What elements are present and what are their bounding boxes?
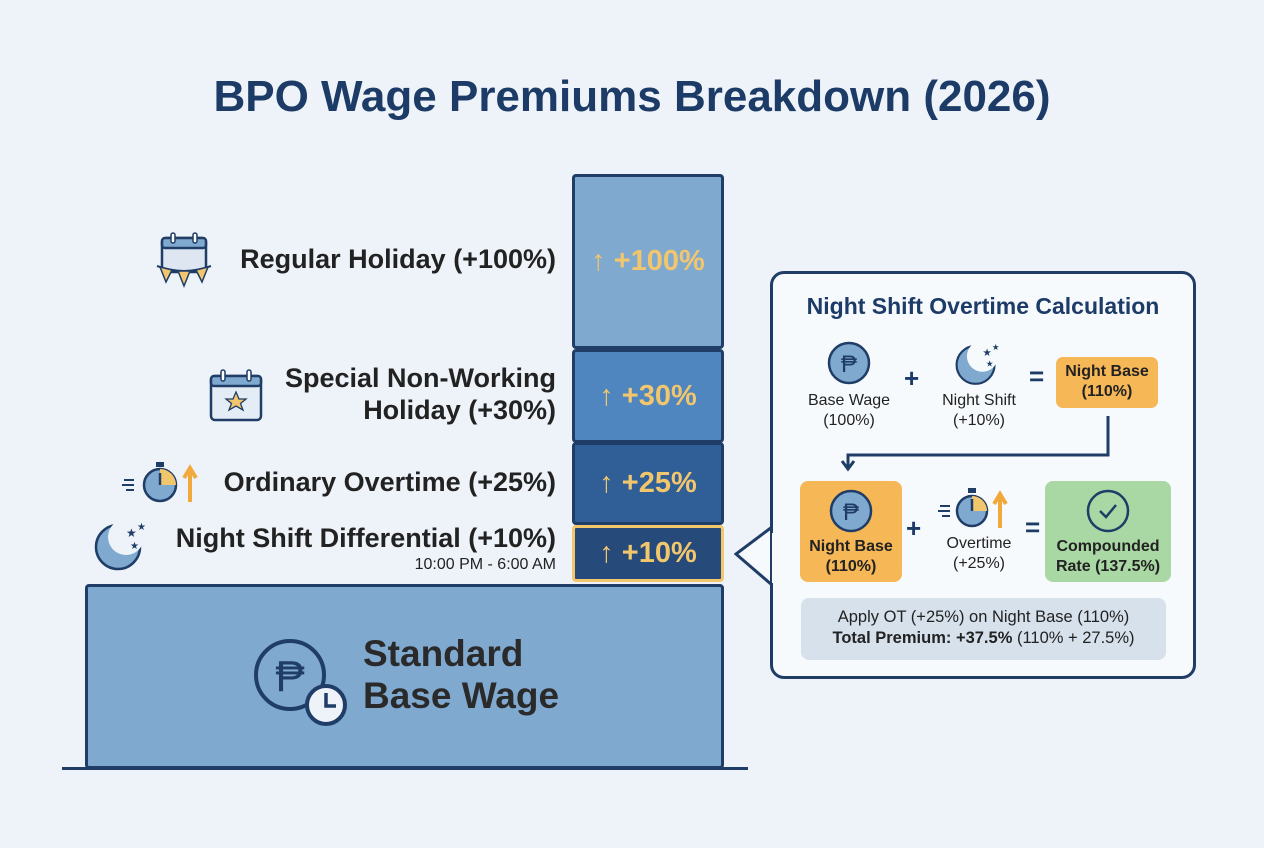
base wage text: Standard	[363, 633, 523, 674]
row 1: base wage	[808, 342, 890, 429]
icon: peso clock	[254, 639, 347, 726]
icon: stopwatch	[122, 462, 198, 502]
icon: moon: ★	[126, 526, 137, 540]
row 1: night shift: ★	[992, 342, 1000, 352]
result: night base: Night Base	[1065, 363, 1149, 380]
row 2: night base box: (110%)	[826, 558, 876, 575]
row 2: night base box: Night Base	[809, 538, 893, 555]
label: overtime: Ordinary Overtime (+25%)	[224, 467, 556, 497]
base wage block	[85, 584, 724, 769]
callout panel: night shift overtime calculation: =	[1025, 512, 1040, 542]
row 1: night shift	[942, 342, 1016, 429]
bar: night shift: ↑ +10%	[599, 537, 697, 569]
result: night base: (110%)	[1082, 383, 1132, 400]
callout panel: night shift overtime calculation: +	[904, 363, 919, 393]
callout panel: night shift overtime calculation: +	[906, 513, 921, 543]
result: compounded rate	[1045, 481, 1171, 582]
row 1: base wage: ₱	[841, 351, 857, 378]
arrow: night base down-left	[840, 416, 1110, 472]
bar: night shift	[572, 525, 724, 582]
summary box: Apply OT (+25%) on Night Base (110%)	[838, 608, 1129, 626]
bar: overtime	[572, 442, 724, 525]
bar: special holiday	[572, 349, 724, 443]
result: compounded rate: Compounded	[1056, 538, 1160, 555]
panel heading: Night Shift Overtime Calculation	[807, 293, 1159, 319]
label: night shift	[94, 522, 556, 573]
row 1: night shift: (+10%)	[953, 412, 1005, 429]
icon: peso clock: ₱	[275, 652, 305, 701]
row 2: overtime: Overtime	[947, 535, 1011, 552]
label: overtime	[122, 462, 556, 502]
row 2: overtime	[938, 488, 1011, 572]
row 2: night base box: ₱	[843, 499, 859, 526]
row 1: base wage: (100%)	[823, 412, 875, 429]
base wage text	[363, 633, 559, 716]
icon: moon: ★	[137, 522, 146, 533]
row 2: overtime: (+25%)	[953, 555, 1005, 572]
baseline	[62, 767, 748, 770]
icon: moon: ★	[130, 541, 139, 552]
icon: calendar star	[210, 369, 262, 422]
label: night shift: Night Shift Differential (+10%)	[176, 523, 556, 553]
bar: regular holiday	[572, 174, 724, 349]
label: special holiday	[210, 363, 556, 425]
label: night shift: 10:00 PM - 6:00 AM	[415, 556, 556, 573]
label: special holiday: Special Non-Working	[285, 363, 556, 393]
label: regular holiday: Regular Holiday (+100%)	[240, 244, 556, 274]
result: night base	[1056, 357, 1158, 408]
row 1: night shift: ★	[986, 359, 994, 369]
row 1: base wage: Base Wage	[808, 392, 890, 409]
callout panel: night shift overtime calculation	[734, 271, 1196, 679]
row 1: night shift: ★	[982, 348, 992, 359]
result: compounded rate: Rate (137.5%)	[1056, 558, 1160, 575]
row 2: night base box	[800, 481, 902, 582]
label: special holiday: Holiday (+30%)	[363, 395, 556, 425]
icon: moon	[94, 522, 146, 570]
base wage text: Base Wage	[363, 675, 559, 716]
label: regular holiday	[156, 232, 556, 288]
summary box	[801, 598, 1166, 660]
bar: special holiday: ↑ +30%	[599, 380, 697, 412]
callout panel: night shift overtime calculation: =	[1029, 361, 1044, 391]
bar: regular holiday: ↑ +100%	[591, 245, 705, 277]
bar: overtime: ↑ +25%	[599, 467, 697, 499]
icon: calendar bunting	[156, 232, 212, 288]
row 1: night shift: Night Shift	[942, 392, 1016, 409]
callout pointer	[734, 526, 770, 586]
title: BPO Wage Premiums Breakdown (2026)	[213, 72, 1051, 121]
summary box: Total Premium: +37.5% (110% + 27.5%)	[832, 629, 1135, 647]
